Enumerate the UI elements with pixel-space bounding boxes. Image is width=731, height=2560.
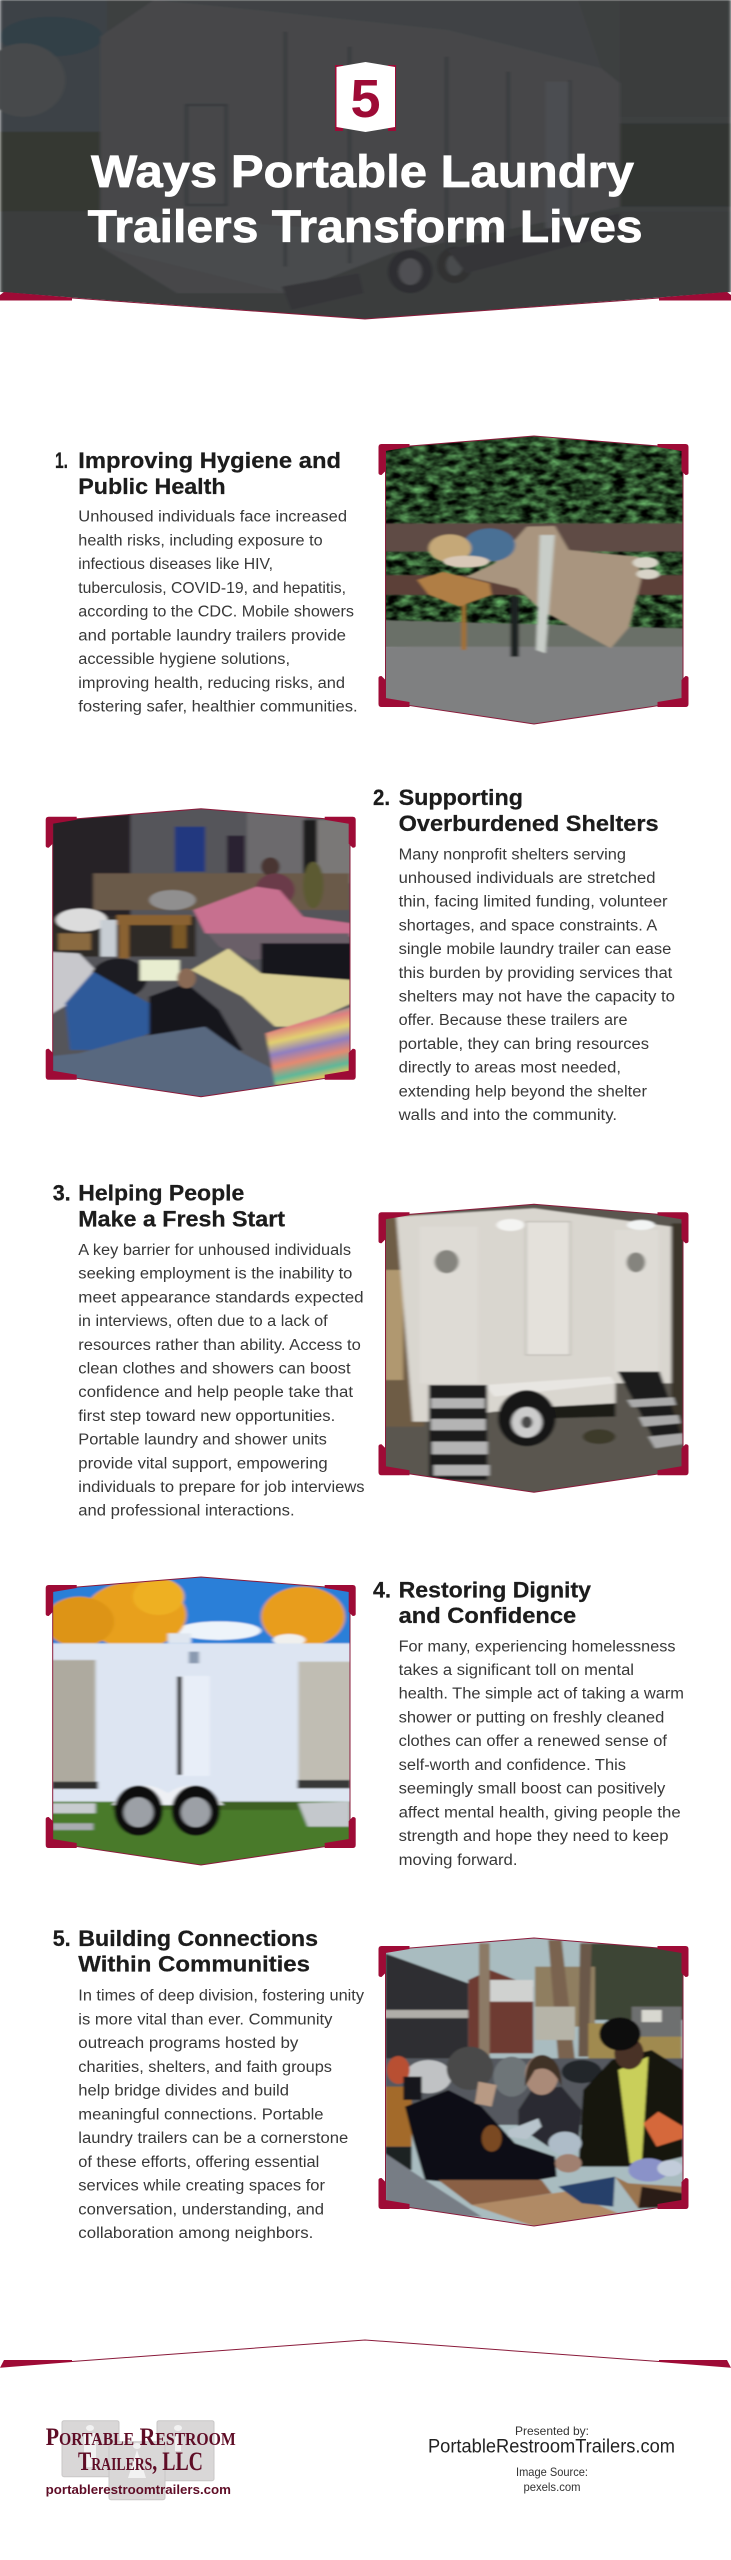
section 4 body text: clothes can offer a renewed sense of [399, 1733, 668, 1750]
image source credit: Image Source: [516, 2465, 588, 2479]
section 1 body text: accessible hygiene solutions, [78, 651, 290, 668]
company logo: portablerestroomtrailers.com [46, 2482, 231, 2497]
presented by credit: PortableRestroomTrailers.com [428, 2437, 675, 2458]
title: Trailers Transform Lives [88, 201, 643, 252]
section 1 body text: according to the CDC. Mobile showers [78, 604, 354, 621]
section 4 body text: self-worth and confidence. This [399, 1757, 626, 1774]
section 4 heading: 4. [373, 1577, 391, 1602]
section 4 body text: moving forward. [399, 1852, 518, 1869]
section 2 body text: directly to areas most needed, [399, 1060, 621, 1077]
section 5 heading: 5. [53, 1926, 71, 1951]
section 2 heading: 2. [373, 785, 390, 810]
number badge [335, 62, 396, 132]
section 1 body text: and portable laundry trailers provide [78, 628, 346, 644]
section 2 body text: thin, facing limited funding, volunteer [399, 894, 668, 911]
footer red edge right [659, 2360, 731, 2368]
section 5 body text: In times of deep division, fostering unity [78, 1988, 364, 2005]
title [88, 146, 643, 252]
header red edge right [659, 292, 731, 300]
company logo: Portable Restroom [46, 2424, 236, 2451]
section 5 body text: laundry trailers can be a cornerstone [78, 2130, 348, 2147]
section 3 body text: Portable laundry and shower units [78, 1432, 327, 1449]
section 1 body text: health risks, including exposure to [78, 532, 323, 549]
section 3 body text: first step toward new opportunities. [78, 1408, 335, 1425]
section 2 heading: Supporting [399, 785, 523, 810]
section 2 body text: walls and into the community. [398, 1107, 617, 1124]
section 3 body text: seeking employment is the inability to [78, 1266, 352, 1283]
section 5 body text: help bridge divides and build [78, 2083, 289, 2100]
section 5 body text: of these efforts, offering essential [78, 2154, 319, 2171]
section 3 body text: and professional interactions. [78, 1503, 295, 1520]
section 4 body text [399, 1638, 684, 1869]
footer panel [0, 2340, 731, 2500]
section 2 body text: Many nonprofit shelters serving [399, 846, 626, 863]
company logo: Trailers, LLC [78, 2447, 203, 2476]
header background photo: trailer [0, 0, 731, 320]
section 2 body text: unhoused individuals are stretched [399, 870, 656, 887]
section 3 body text [78, 1242, 365, 1520]
section 3 body text: A key barrier for unhoused individuals [78, 1242, 351, 1259]
header lower chevron line [72, 298, 659, 319]
section 2 body text: offer. Because these trailers are [399, 1012, 628, 1029]
section 3 photo: white trailer with steps [378, 1200, 688, 1500]
section 3 body text: confidence and help people take that [78, 1384, 354, 1401]
section 2 [46, 785, 675, 1124]
section 3 body text: resources rather than ability. Access to [78, 1337, 361, 1354]
section 4 body text: seemingly small boost can positively [399, 1781, 666, 1798]
section 5 body text: outreach programs hosted by [78, 2035, 299, 2052]
section 2 body text: shelters may not have the capacity to [399, 988, 675, 1006]
section 2 body text: extending help beyond the shelter [399, 1083, 647, 1100]
section 3 body text: provide vital support, empowering [78, 1455, 328, 1472]
presented by credit [428, 2424, 675, 2458]
footer red edge left [0, 2360, 72, 2368]
section 2 body text [398, 846, 675, 1124]
section 3 body text: individuals to prepare for job interviews [78, 1479, 365, 1496]
section 5 body text: conversation, understanding, and [78, 2201, 324, 2218]
title: Ways Portable Laundry [91, 146, 634, 197]
image source credit [516, 2465, 588, 2494]
section 4 heading: and Confidence [399, 1603, 576, 1628]
section 2 photo: crowded shelter [46, 803, 356, 1103]
section 3 body text: clean clothes and showers can boost [78, 1360, 351, 1378]
section 4 photo: restroom trailer under autumn trees [44, 1573, 356, 1868]
section 4 body text: health. The simple act of taking a warm [399, 1686, 684, 1703]
section 5 body text: charities, shelters, and faith groups [78, 2059, 332, 2076]
section 1 body text: Unhoused individuals face increased [78, 509, 347, 526]
section 1 body text: infectious diseases like HIV, [78, 556, 273, 573]
section 4 body text: shower or putting on freshly cleaned [399, 1710, 664, 1726]
section 4 body text: takes a significant toll on mental [399, 1662, 634, 1679]
image source credit: pexels.com [524, 2480, 580, 2494]
section 1 heading: Improving Hygiene and [78, 448, 341, 473]
section 2 heading [373, 785, 659, 836]
section 1 heading: Public Health [78, 474, 226, 499]
section 4 body text: For many, experiencing homelessness [399, 1638, 676, 1655]
section 5 heading: Within Communities [78, 1952, 310, 1977]
section 2 body text: shortages, and space constraints. A [399, 917, 658, 934]
section 1 heading: 1. [55, 448, 68, 473]
section 1 body text: tuberculosis, COVID-19, and hepatitis, [78, 580, 346, 597]
section 5 body text: meaningful connections. Portable [78, 2106, 324, 2123]
section 3 body text: in interviews, often due to a lack of [78, 1313, 328, 1330]
section 3 body text: meet appearance standards expected [78, 1289, 364, 1306]
company logo [46, 2421, 236, 2500]
section 4 body text: affect mental health, giving people the [399, 1804, 681, 1822]
section 4 body text: strength and hope they need to keep [399, 1828, 668, 1845]
section 1 heading [55, 448, 341, 499]
section 5 body text: services while creating spaces for [78, 2178, 325, 2195]
presented by credit: Presented by: [515, 2424, 589, 2438]
section 2 body text: this burden by providing services that [399, 965, 673, 982]
section 5 heading: Building Connections [78, 1926, 318, 1951]
section 1 body text: improving health, reducing risks, and [78, 675, 345, 692]
header panel [0, 0, 731, 320]
section 5 body text: is more vital than ever. Community [78, 2011, 333, 2028]
section 1 body text: fostering safer, healthier communities. [78, 699, 358, 716]
section 5 photo: volunteers sorting donations [378, 1937, 688, 2230]
header red edge left [0, 292, 72, 300]
number badge: 5 [350, 69, 381, 129]
section 2 body text: single mobile laundry trailer can ease [399, 941, 671, 958]
section 3 [53, 1181, 688, 1520]
section 3 heading [53, 1181, 286, 1232]
footer top chevron line [72, 2340, 659, 2362]
section 4 heading: Restoring Dignity [399, 1577, 592, 1602]
section 4 heading [373, 1577, 592, 1628]
section 3 heading: Helping People [78, 1181, 244, 1206]
section 2 heading: Overburdened Shelters [399, 811, 659, 836]
section 1 [55, 433, 688, 727]
section 5 body text [78, 1988, 364, 2242]
section 1 photo: person sleeping on bench [378, 433, 688, 727]
section 5 body text: collaboration among neighbors. [78, 2225, 313, 2242]
section 2 body text: portable, they can bring resources [399, 1036, 649, 1053]
section 4 [44, 1573, 684, 1869]
section 5 [53, 1926, 688, 2242]
section 1 body text [78, 509, 358, 716]
section 3 heading: Make a Fresh Start [78, 1207, 286, 1232]
section 3 heading: 3. [53, 1181, 71, 1206]
section 5 heading [53, 1926, 318, 1977]
